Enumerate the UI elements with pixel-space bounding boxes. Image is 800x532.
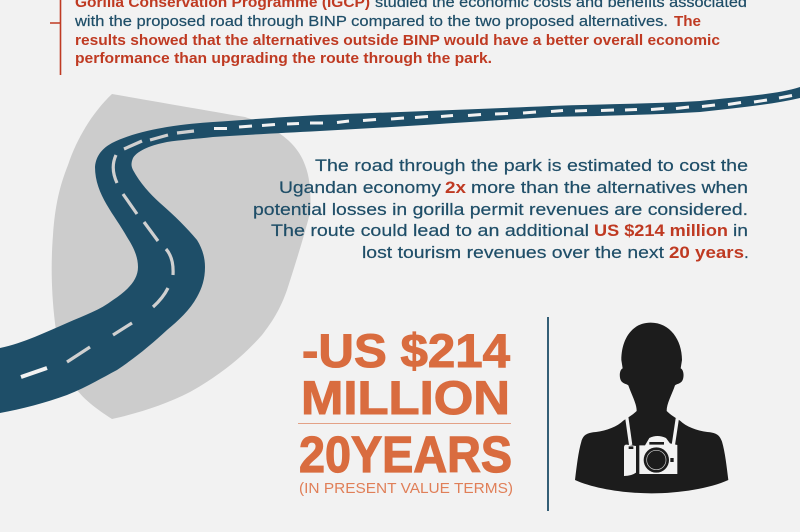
camera body bbox=[639, 436, 677, 474]
panel: intro text with red bracket bbox=[50, 0, 747, 75]
text block: road cost summary: The road through the park is estimated to cost the bbox=[315, 156, 748, 175]
text block: road cost summary: in bbox=[733, 221, 748, 240]
text block: road cost summary: The route could lead to an additional bbox=[271, 221, 589, 240]
divider bbox=[298, 422, 511, 424]
text block: road cost summary: US $214 million bbox=[594, 221, 728, 240]
winding road bbox=[0, 87, 800, 413]
road dashes, white section bbox=[21, 368, 47, 377]
intro paragraph bbox=[74, 0, 747, 67]
present value note: (IN PRESENT VALUE TERMS) bbox=[299, 480, 513, 497]
million: MILLION bbox=[301, 371, 510, 424]
road dashes, grey section bbox=[67, 131, 194, 362]
text block: road cost summary: 2x bbox=[445, 178, 467, 197]
text block: road cost summary: . bbox=[744, 243, 749, 262]
red bracket bbox=[50, 0, 60, 75]
gray map shape bbox=[52, 94, 310, 419]
road surface bbox=[0, 87, 800, 413]
camera lens bbox=[644, 447, 669, 473]
intro paragraph: results showed that the alternatives outside BINP would have a better overall economic bbox=[75, 33, 720, 49]
minus US $214: -US $214 bbox=[302, 324, 510, 377]
icon: tourist with camera bbox=[575, 323, 728, 493]
silhouette bbox=[575, 323, 728, 493]
intro paragraph: The bbox=[674, 14, 701, 30]
camera details bbox=[629, 442, 674, 462]
intro paragraph: performance than upgrading the route through the park. bbox=[75, 51, 492, 67]
text block: road cost summary: Ugandan economy bbox=[279, 178, 442, 197]
vertical divider bbox=[547, 317, 549, 511]
camera grip bbox=[624, 445, 636, 476]
text block: road cost summary: lost tourism revenues over the next bbox=[362, 243, 664, 262]
big statistic: lost revenue bbox=[298, 324, 513, 497]
text block: road cost summary: potential losses in gorilla permit revenues are considered. bbox=[253, 200, 748, 219]
camera strap bbox=[627, 417, 677, 445]
text block: road cost summary: 20 years bbox=[669, 243, 744, 262]
text block: road cost summary bbox=[253, 156, 749, 262]
intro paragraph: with the proposed road through BINP compared to the two proposed alternatives. bbox=[74, 14, 668, 30]
text block: road cost summary: more than the alternatives when bbox=[471, 178, 748, 197]
20 years: 20YEARS bbox=[299, 426, 512, 483]
